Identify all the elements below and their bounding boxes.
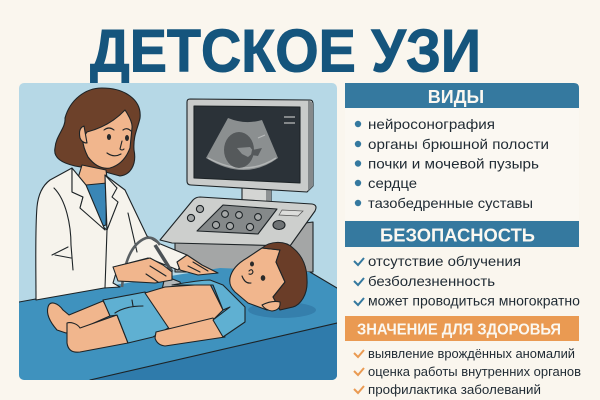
panel: значение для здоровья (345, 316, 581, 397)
list: безопасность (354, 253, 580, 308)
title: ДЕТСКОЕ УЗИ (90, 18, 481, 84)
doctor (36, 88, 218, 300)
heading text: безопасность: БЕЗОПАСНОСТЬ (380, 226, 535, 246)
list: виды: сердце (368, 175, 417, 191)
heading text: виды: ВИДЫ (428, 87, 484, 107)
illustration panel: ultrasound exam (19, 83, 337, 380)
list: виды: тазобедренные суставы (368, 195, 533, 211)
list: безопасность: безболезненность (368, 273, 495, 289)
panel: виды (345, 83, 579, 220)
list: виды (355, 116, 549, 211)
heading: значение (345, 316, 579, 341)
list: значение: профилактика заболеваний (368, 382, 541, 397)
table (19, 268, 337, 380)
panel: безопасность (345, 221, 580, 308)
ultrasound machine (160, 99, 316, 272)
list: безопасность: может проводиться многократно (368, 292, 580, 308)
list: безопасность: отсутствие облучения (368, 253, 521, 269)
list: виды: органы брюшной полости (368, 136, 549, 152)
child (47, 242, 307, 352)
heading text: значение: ЗНАЧЕНИЕ ДЛЯ ЗДОРОВЬЯ (357, 322, 561, 338)
list: значение (354, 346, 581, 397)
heading: безопасность (345, 221, 579, 247)
list: значение: выявление врождённых аномалий (368, 346, 575, 361)
list: виды: почки и мочевой пузырь (368, 156, 539, 172)
heading: виды (345, 83, 579, 108)
list: виды: нейросонография (368, 116, 495, 132)
list: значение: оценка работы внутренних органов (368, 364, 581, 379)
